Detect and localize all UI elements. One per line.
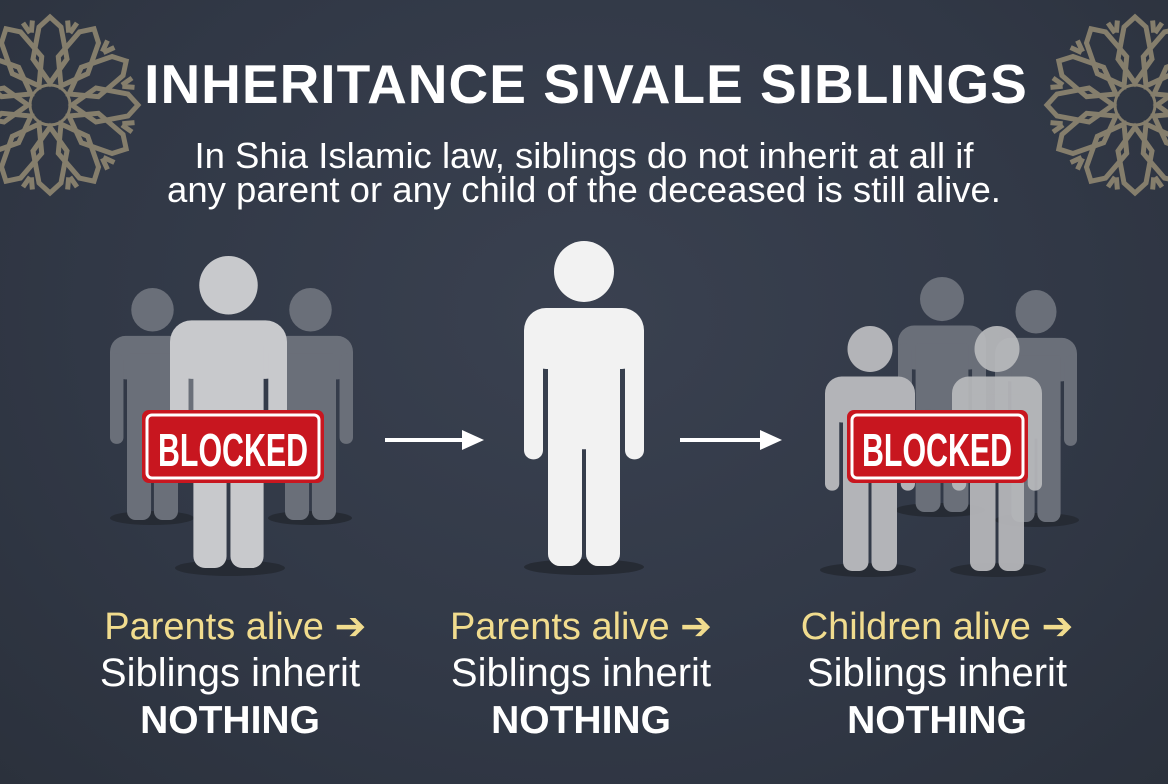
caption: right <box>801 606 1073 742</box>
subtitle: any parent or any child of the deceased is still alive. <box>167 169 1001 210</box>
caption: center: Parents alive ➔ <box>450 606 712 648</box>
figure group: left parents blocked <box>110 256 353 576</box>
subtitle <box>167 135 1001 210</box>
title: INHERITANCE SIVALE SIBLINGS <box>144 53 1028 115</box>
caption: left <box>100 606 366 742</box>
figure: center deceased <box>524 241 644 575</box>
arrow 2 <box>680 430 782 450</box>
caption: left: Parents alive ➔ <box>104 606 366 648</box>
caption: right: Children alive ➔ <box>801 606 1073 648</box>
blocked sign left <box>142 410 324 483</box>
caption: left: NOTHING <box>140 699 320 742</box>
figure group: right children blocked <box>820 277 1079 577</box>
blocked sign right: BLOCKED <box>862 424 1012 476</box>
blocked sign left: BLOCKED <box>158 424 308 476</box>
ornament: top-left <box>0 15 140 195</box>
caption: left: Siblings inherit <box>100 651 360 695</box>
arrow 1 <box>385 430 484 450</box>
ornament: top-right <box>1045 15 1168 195</box>
caption: center <box>450 606 712 742</box>
blocked sign right <box>847 410 1028 483</box>
caption: center: Siblings inherit <box>451 651 711 695</box>
caption: center: NOTHING <box>491 699 671 742</box>
caption: right: NOTHING <box>847 699 1027 742</box>
caption: right: Siblings inherit <box>807 651 1067 695</box>
subtitle: In Shia Islamic law, siblings do not inherit at all if <box>194 135 974 176</box>
